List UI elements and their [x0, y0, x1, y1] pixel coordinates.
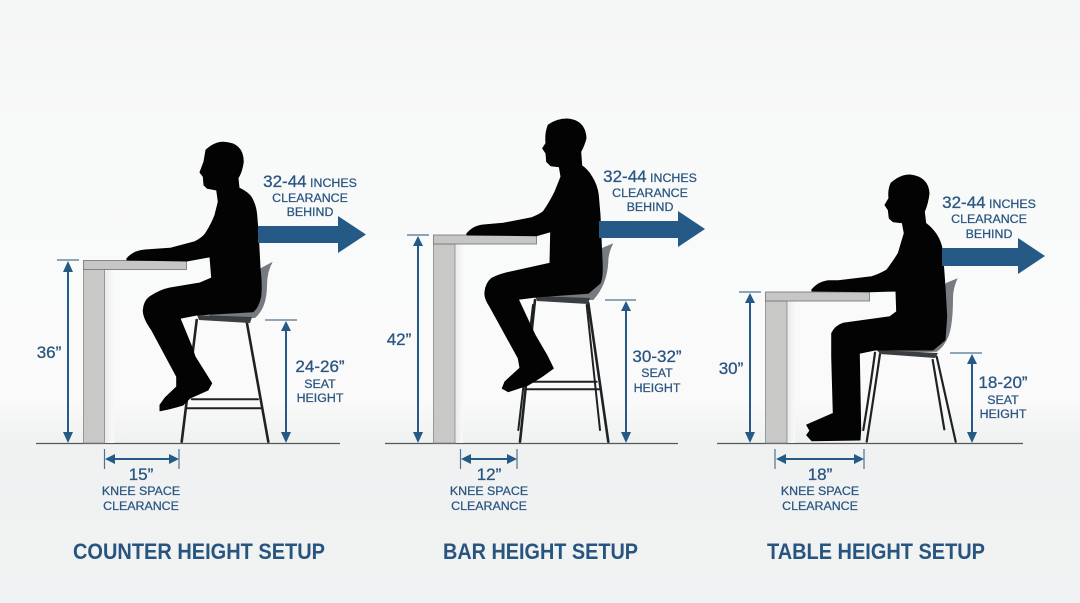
dining table — [766, 292, 870, 443]
panel: table height setup — [717, 175, 1045, 564]
floor line — [385, 442, 678, 444]
dimension: table height 36 — [37, 260, 79, 443]
dimension: seat height: SEAT — [641, 366, 673, 380]
dimension: knee space — [450, 449, 528, 513]
dimension: table height 42: 42” — [387, 330, 412, 349]
heading: counter: COUNTER HEIGHT SETUP — [73, 539, 325, 564]
dimension: knee space: 15” — [129, 465, 154, 484]
dimension: knee space: 12” — [477, 465, 502, 484]
dimension: knee space — [775, 449, 864, 513]
dimension: knee space: CLEARANCE — [103, 499, 179, 513]
dimension: seat height: HEIGHT — [634, 381, 681, 395]
panel: bar height setup — [385, 119, 705, 564]
dimension: knee space: KNEE SPACE — [450, 484, 528, 498]
panel: counter height setup — [36, 142, 366, 564]
floor line — [717, 442, 1023, 444]
person silhouette — [467, 119, 602, 392]
clearance label: CLEARANCE — [272, 191, 348, 205]
clearance label: CLEARANCE — [612, 186, 688, 200]
dimension: seat height: 24-26” — [295, 357, 345, 376]
clearance label: CLEARANCE — [951, 212, 1027, 226]
dimension: seat height — [265, 320, 345, 443]
dimension: table height 30 — [719, 292, 761, 443]
clearance label: 32-44 INCHES — [603, 167, 697, 186]
dimension: seat height: 18-20” — [978, 373, 1028, 392]
dimension: table height 42 — [387, 235, 429, 443]
clearance label: BEHIND — [627, 200, 673, 214]
clearance label: 32-44 INCHES — [263, 172, 357, 191]
stool — [518, 243, 613, 442]
dimension: seat height: SEAT — [987, 393, 1019, 407]
dimension: seat height: HEIGHT — [297, 391, 344, 405]
stool — [182, 262, 273, 442]
dimension: table height 36: 36” — [37, 343, 62, 362]
dimension: knee space: KNEE SPACE — [781, 484, 859, 498]
dimension: knee space: CLEARANCE — [782, 499, 858, 513]
dimension: seat height: HEIGHT — [980, 407, 1027, 421]
heading: bar: BAR HEIGHT SETUP — [443, 539, 638, 564]
clearance label: 32-44 INCHES — [942, 193, 1036, 212]
person silhouette — [127, 142, 261, 411]
clearance label: BEHIND — [966, 227, 1012, 241]
dimension: seat height — [950, 353, 1028, 443]
arrow: clearance behind — [942, 238, 1045, 274]
clearance label: BEHIND — [287, 205, 333, 219]
arrow: clearance behind — [258, 216, 366, 253]
counter table — [84, 260, 186, 443]
person silhouette — [807, 175, 947, 441]
dimension: knee space: 18” — [808, 465, 833, 484]
dimension: seat height — [605, 300, 682, 443]
chair — [863, 278, 958, 442]
bar table — [434, 235, 536, 443]
heading: table: TABLE HEIGHT SETUP — [767, 539, 985, 564]
dimension: seat height: SEAT — [304, 377, 336, 391]
dimension: knee space: KNEE SPACE — [102, 484, 180, 498]
dimension: knee space: CLEARANCE — [451, 499, 527, 513]
dimension: knee space — [102, 449, 180, 513]
arrow: clearance behind — [599, 211, 705, 247]
floor line — [36, 442, 340, 444]
dimension: table height 30: 30” — [719, 359, 744, 378]
dimension: seat height: 30-32” — [632, 347, 682, 366]
